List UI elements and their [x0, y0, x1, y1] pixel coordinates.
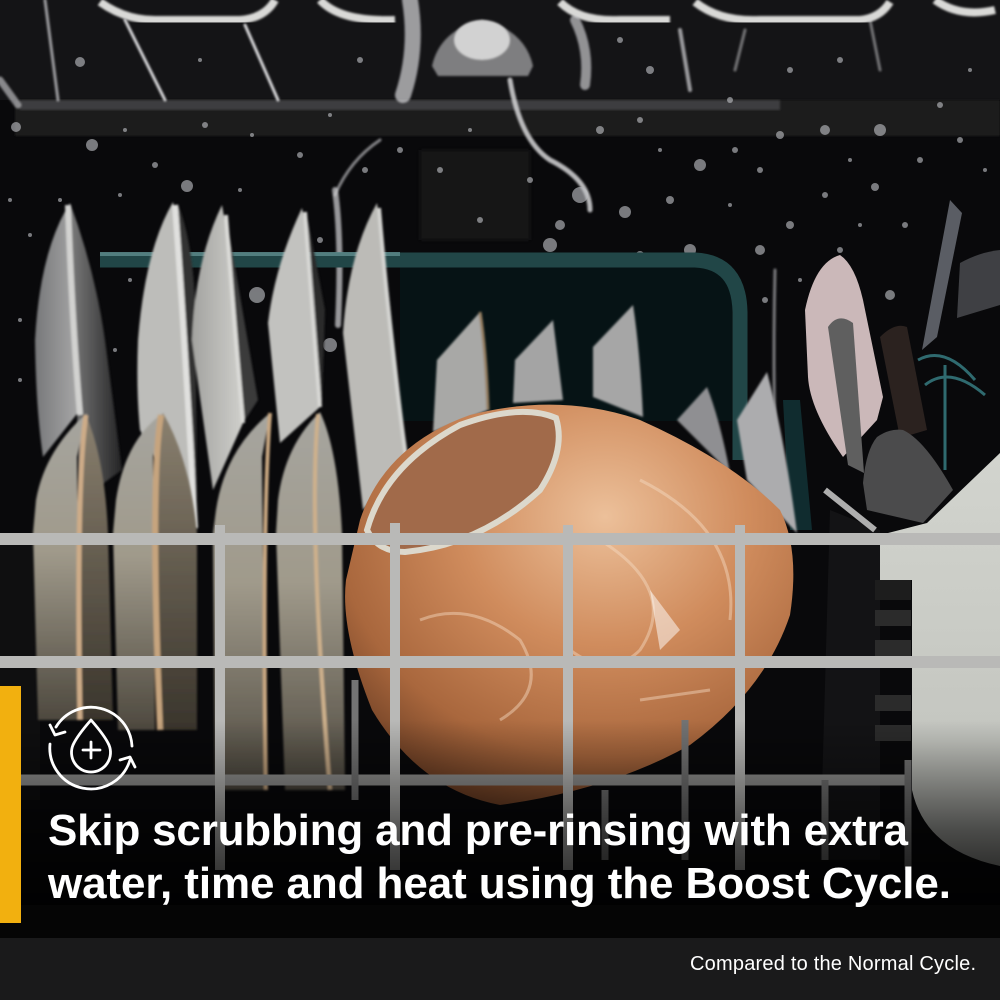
water streams [0, 0, 880, 510]
heading: Skip scrubbing and pre-rinsing with extra [48, 806, 909, 855]
water droplets [8, 37, 987, 396]
white basket [875, 453, 1000, 866]
yellow accent bar [0, 686, 21, 923]
upper rack wires [100, 0, 995, 20]
front plates with tan rims [33, 412, 345, 790]
tall plates, back row [35, 202, 407, 530]
terracotta bowl [345, 405, 793, 805]
upper spray arm [15, 20, 1000, 136]
small plates behind bowl [433, 305, 797, 533]
green tray behind dishes [100, 254, 812, 530]
bottom darkening gradient [0, 720, 1000, 940]
footnote: Compared to the Normal Cycle. [690, 953, 976, 975]
lower band [0, 905, 1000, 1000]
utensils basket [805, 200, 1000, 860]
heading: water, time and heat using the Boost Cycle. [47, 859, 951, 908]
dish rack wires [0, 523, 1000, 870]
icon: water drop with plus and cycle arrows [50, 707, 135, 789]
